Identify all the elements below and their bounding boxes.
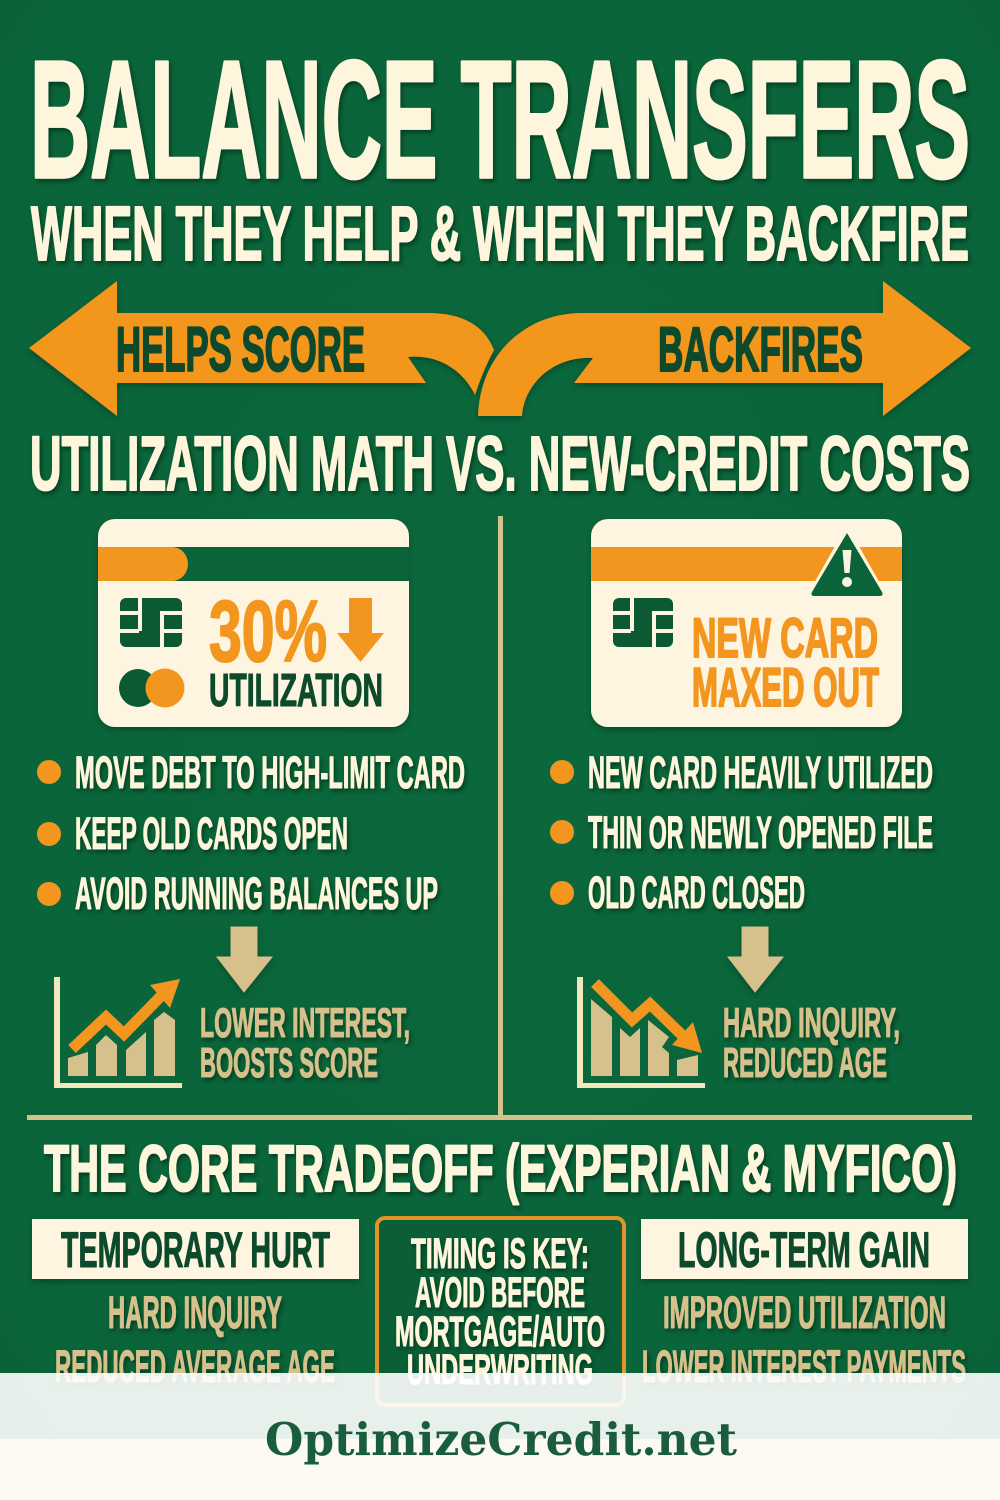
icon: warning triangle xyxy=(804,525,890,601)
panel: timing is key callout: TIMING IS KEY: xyxy=(411,1230,589,1278)
arrow: right result xyxy=(728,927,783,992)
panel: left credit card xyxy=(98,519,409,727)
arrow: left result xyxy=(217,927,272,992)
panel: temporary hurt xyxy=(32,1219,359,1392)
panel: right credit card xyxy=(591,519,902,727)
panel: temporary hurt: REDUCED AVERAGE AGE xyxy=(55,1341,335,1392)
footer band xyxy=(0,1373,1000,1500)
list: left bullets: AVOID RUNNING BALANCES UP xyxy=(75,868,438,919)
panel: timing is key callout: UNDERWRITING xyxy=(407,1346,593,1394)
result text: left: BOOSTS SCORE xyxy=(200,1039,378,1086)
panel: timing is key callout: MORTGAGE/AUTO xyxy=(395,1308,605,1356)
list: right bullets xyxy=(550,747,933,918)
result text: right xyxy=(723,999,900,1086)
arrow: helps score (left): HELPS SCORE xyxy=(116,315,365,385)
arrow: backfires (right) xyxy=(478,281,971,416)
icon: overlapping circles xyxy=(119,668,184,708)
result text: left: LOWER INTEREST, xyxy=(200,999,410,1046)
list: left bullets xyxy=(37,747,465,919)
panel: timing is key callout xyxy=(377,1218,624,1405)
icon: down arrow xyxy=(337,598,384,662)
card figure: 30%: 30% xyxy=(209,584,327,680)
icon: card chip xyxy=(613,598,673,647)
chart: rising bars xyxy=(54,977,182,1088)
panel: timing is key callout: AVOID BEFORE xyxy=(415,1269,585,1317)
footer brand: OptimizeCredit.net: OptimizeCredit.net xyxy=(265,1413,737,1466)
bottom divider xyxy=(27,1115,972,1120)
panel: temporary hurt: HARD INQUIRY xyxy=(108,1287,282,1338)
icon: card chip xyxy=(120,598,182,647)
list: left bullets: MOVE DEBT TO HIGH-LIMIT CARD xyxy=(75,747,465,798)
arrow: helps score (left) xyxy=(29,281,494,416)
card label: utilization: UTILIZATION xyxy=(209,664,383,716)
result text: left xyxy=(200,999,410,1086)
chart: falling bars xyxy=(577,977,705,1088)
panel: temporary hurt: TEMPORARY HURT xyxy=(61,1222,330,1278)
panel: long-term gain xyxy=(641,1219,968,1392)
list: left bullets: KEEP OLD CARDS OPEN xyxy=(75,808,348,859)
center divider xyxy=(498,516,503,1116)
card text: new card: NEW CARD xyxy=(692,606,878,669)
